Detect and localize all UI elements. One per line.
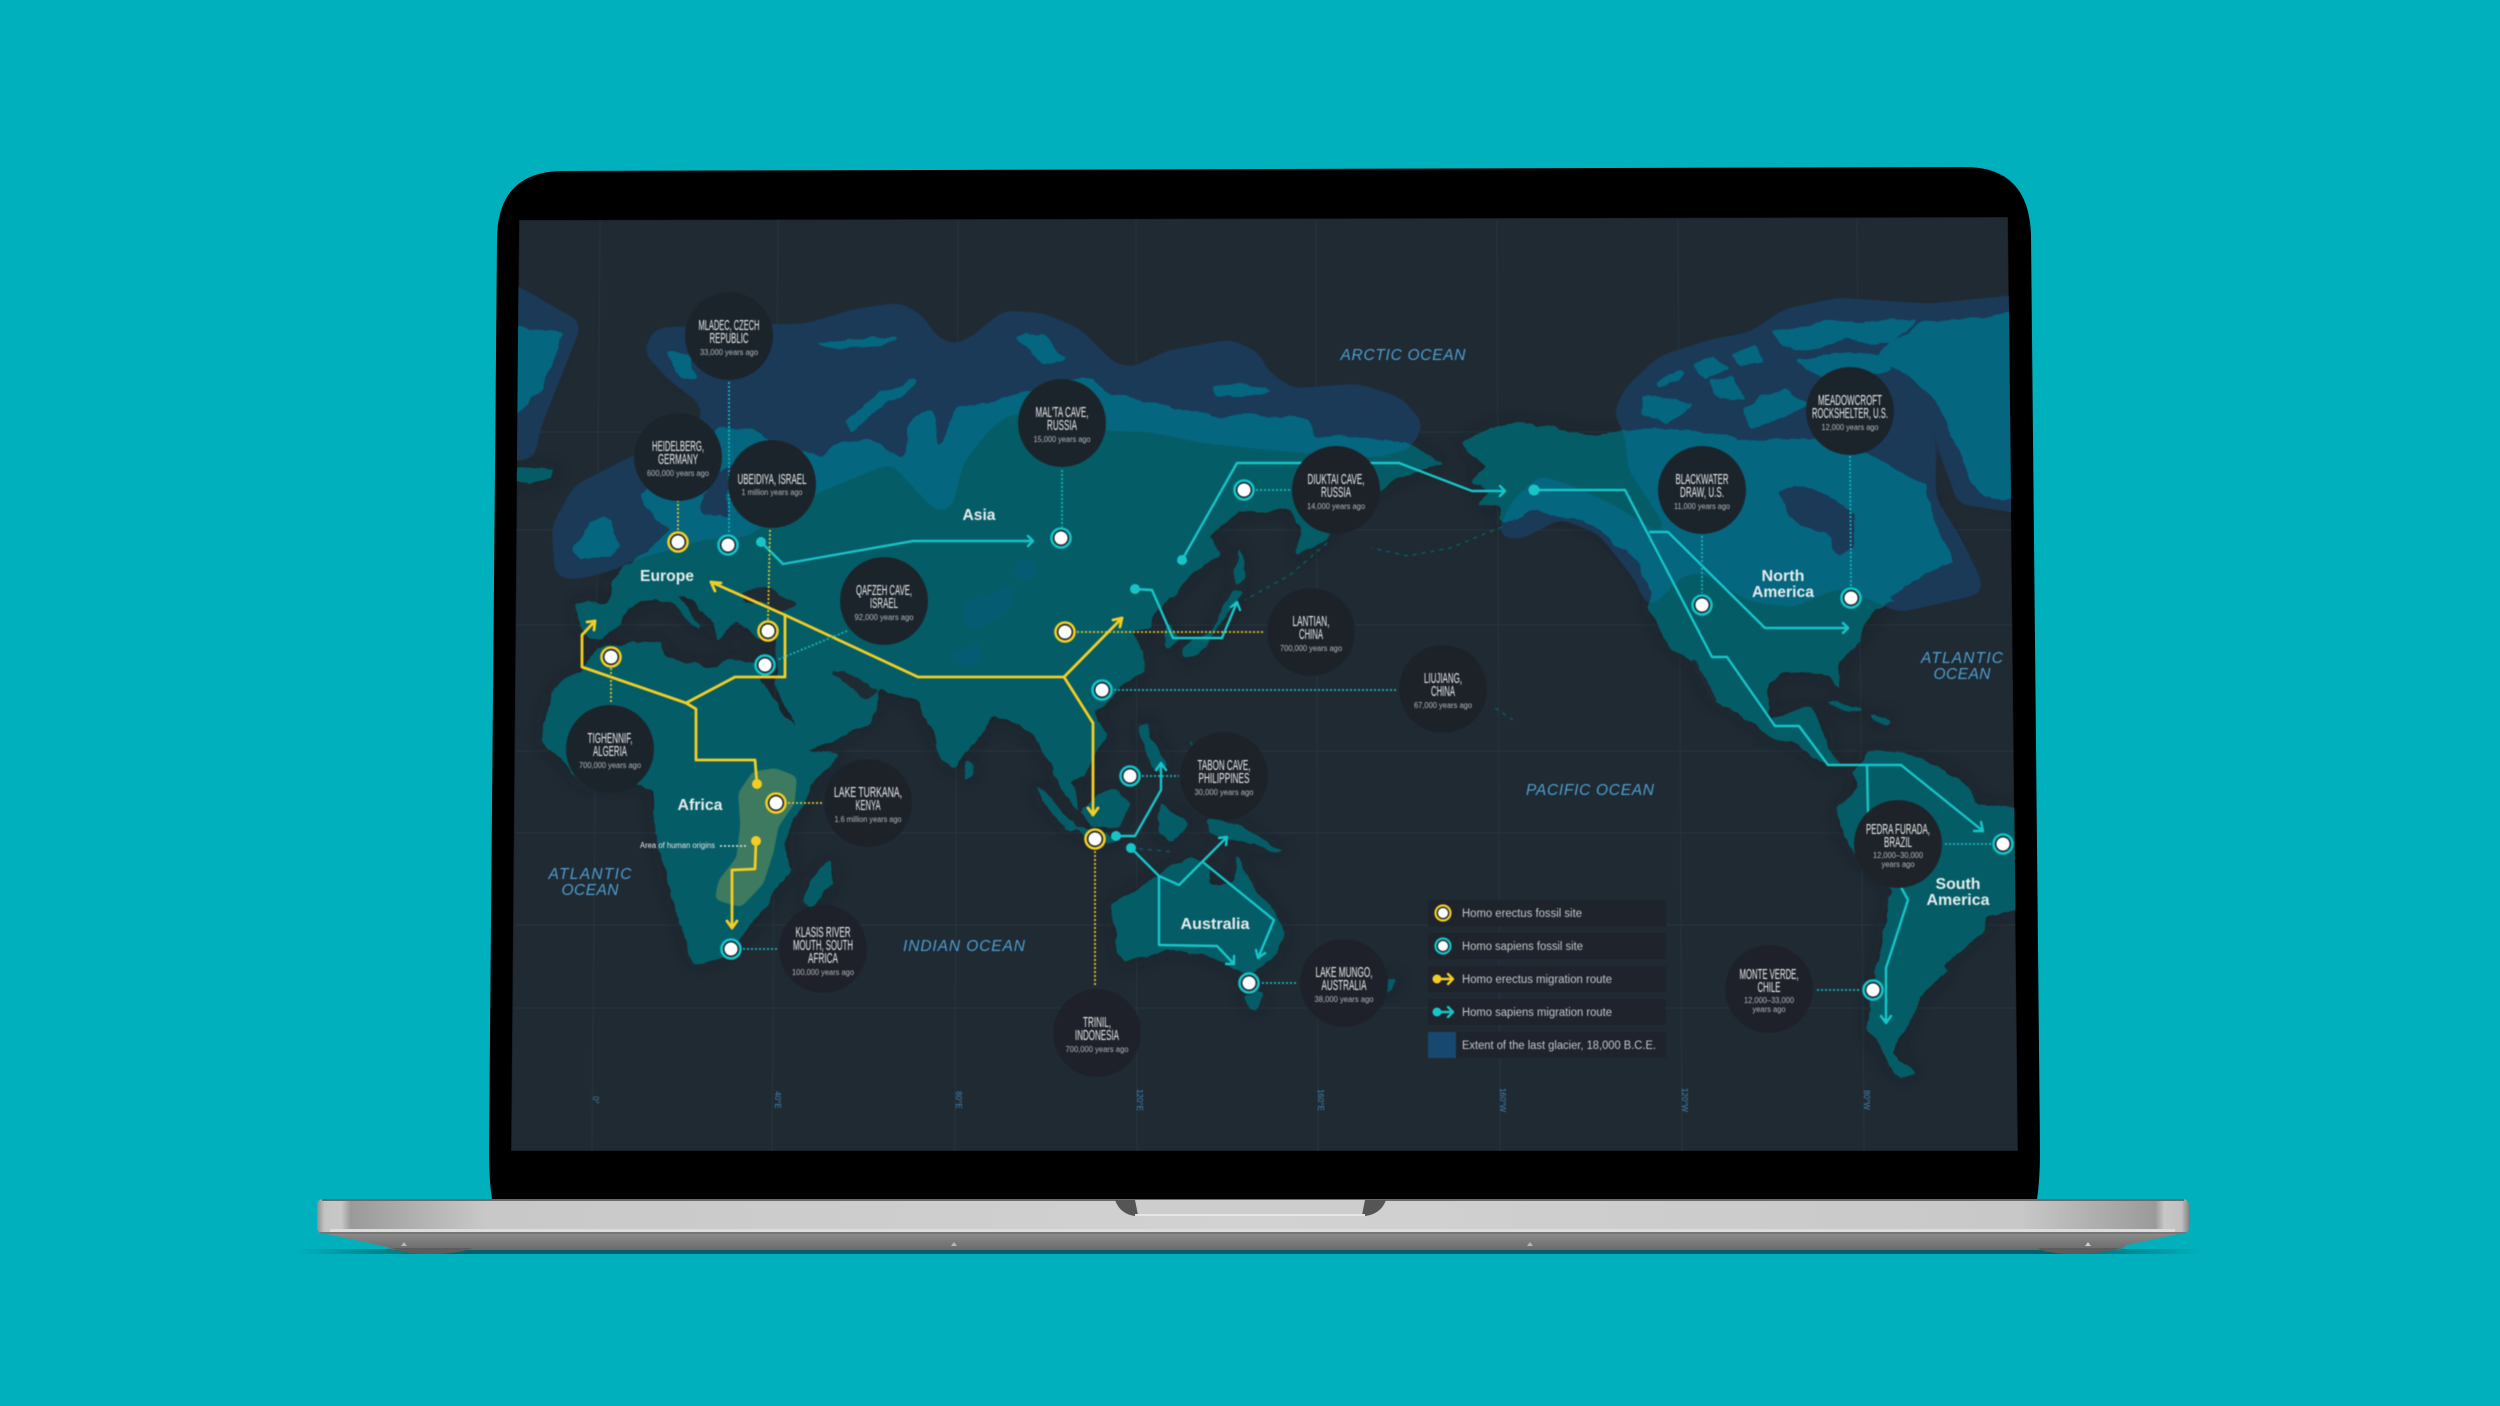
bubble: Tighennif: ALGERIA bbox=[593, 744, 627, 760]
bubble: Meadowcroft: MEADOWCROFT bbox=[1818, 393, 1882, 409]
bubble: Lake Turkana: KENYA bbox=[856, 798, 881, 814]
bubble: Tabon: 30,000 years ago bbox=[1194, 787, 1254, 797]
ocean labels: OCEAN bbox=[1934, 666, 1991, 683]
bubble: Monte Verde: MONTE VERDE, bbox=[1740, 967, 1798, 983]
bubble: Mal'ta: MAL'TA CAVE, bbox=[1036, 405, 1088, 421]
ocean labels: ARCTIC OCEAN bbox=[1340, 347, 1466, 364]
continent labels: America bbox=[1926, 892, 1990, 909]
bubble: Mal'ta: 15,000 years ago bbox=[1034, 434, 1091, 444]
continent labels: Europe bbox=[640, 568, 694, 585]
bubble: Lake Turkana bbox=[824, 759, 912, 847]
bubble: Pedra Furada: years ago bbox=[1882, 859, 1915, 869]
coastal shadow bbox=[733, 624, 1866, 925]
bubble: Diuktai bbox=[1292, 446, 1380, 534]
marker centres bbox=[604, 484, 2010, 996]
bubble: Ubeidiya bbox=[728, 440, 816, 528]
bubble: Heidelberg: 600,000 years ago bbox=[647, 468, 709, 478]
bubble: Diuktai: DIUKTAI CAVE, bbox=[1308, 472, 1364, 488]
bubble: Ubeidiya: UBEIDIYA, ISRAEL bbox=[738, 472, 806, 488]
bubble: Mal'ta: RUSSIA bbox=[1047, 418, 1077, 434]
bubble: Pedra Furada: BRAZIL bbox=[1884, 835, 1912, 851]
longitude labels: 160°E bbox=[1316, 1089, 1325, 1111]
bubble: Meadowcroft bbox=[1806, 367, 1894, 455]
area of human origins bbox=[719, 772, 793, 903]
hinge notch bbox=[1115, 1200, 1386, 1216]
bubble: Qafzeh bbox=[840, 557, 928, 645]
bubble: Trinil: 700,000 years ago bbox=[1066, 1044, 1129, 1054]
legend row: sapiens route: Homo sapiens migration route bbox=[1462, 1007, 1612, 1019]
bubble: Tighennif: TIGHENNIF, bbox=[588, 731, 632, 747]
ocean labels: ATLANTIC bbox=[548, 866, 632, 883]
laptop base shadow bbox=[295, 1249, 2205, 1254]
bubble: Trinil: TRINIL, bbox=[1083, 1015, 1111, 1031]
bubble: Lake Mungo: 38,000 years ago bbox=[1314, 994, 1374, 1004]
land masses bbox=[500, 310, 2040, 1077]
bubble: Diuktai: RUSSIA bbox=[1321, 485, 1351, 501]
bubble: Meadowcroft: ROCKSHELTER, U.S. bbox=[1812, 406, 1888, 422]
bubble: Meadowcroft: 12,000 years ago bbox=[1822, 422, 1879, 432]
bubble: Klasis River: MOUTH, SOUTH bbox=[793, 938, 853, 954]
bubble: Klasis River: AFRICA bbox=[808, 951, 838, 967]
bubble: Mladec: MLADEC, CZECH bbox=[698, 318, 760, 334]
bubble: Liujiang bbox=[1399, 645, 1487, 733]
Homo sapiens site markers bbox=[718, 480, 2012, 1000]
Homo sapiens migration routes bbox=[756, 463, 1983, 1023]
bubble: Tabon: PHILIPPINES bbox=[1198, 771, 1250, 787]
bubble: Lake Turkana: LAKE TURKANA, bbox=[834, 785, 902, 801]
bubble: Heidelberg: HEIDELBERG, bbox=[652, 439, 704, 455]
laptop bezel bbox=[489, 167, 2040, 1199]
bubble: Tabon: TABON CAVE, bbox=[1198, 758, 1250, 774]
area of human origins label: Area of human origins bbox=[640, 841, 715, 850]
continent labels: North bbox=[1762, 568, 1804, 585]
continent labels bbox=[640, 507, 1990, 933]
bubble: Tighennif: 700,000 years ago bbox=[579, 760, 641, 770]
bubble: Qafzeh: QAFZEH CAVE, bbox=[856, 583, 912, 599]
bubble: Lantian: 700,000 years ago bbox=[1280, 643, 1342, 653]
bubble: Liujiang: CHINA bbox=[1431, 684, 1455, 700]
leader lines bbox=[611, 382, 1991, 990]
bubble: Lake Mungo: AUSTRALIA bbox=[1322, 978, 1367, 994]
continent labels: Australia bbox=[1180, 916, 1250, 933]
legend row: glacier extent bbox=[1428, 1032, 1666, 1058]
legend row: erectus route: Homo erectus migration route bbox=[1462, 974, 1612, 986]
ocean labels: INDIAN OCEAN bbox=[903, 938, 1026, 955]
legend row: erectus fossil site: Homo erectus fossil site bbox=[1462, 908, 1582, 920]
legend row: sapiens fossil site bbox=[1428, 933, 1666, 959]
longitude labels: 0° bbox=[591, 1096, 600, 1104]
bubble: Liujiang: 67,000 years ago bbox=[1414, 700, 1472, 710]
bubble: Heidelberg: GERMANY bbox=[658, 452, 698, 468]
bubble: Trinil bbox=[1053, 989, 1141, 1077]
legend row: erectus fossil site bbox=[1428, 900, 1666, 926]
bubble: Liujiang: LIUJIANG, bbox=[1424, 671, 1462, 687]
bubble: Blackwater Draw bbox=[1658, 446, 1746, 534]
ocean labels: OCEAN bbox=[562, 882, 619, 899]
Homo erectus site markers bbox=[602, 532, 1104, 848]
glacier extent bbox=[495, 278, 2040, 608]
bubble: Klasis River bbox=[779, 905, 867, 993]
bubble: Ubeidiya: 1 million years ago bbox=[742, 487, 803, 497]
longitude labels: 120°W bbox=[1680, 1088, 1689, 1112]
legend row: sapiens route bbox=[1428, 999, 1666, 1025]
bubble: Pedra Furada bbox=[1854, 800, 1942, 888]
bubble: Blackwater Draw: BLACKWATER bbox=[1676, 472, 1728, 488]
bubble: Mladec bbox=[684, 319, 774, 380]
longitude labels: 80°E bbox=[954, 1091, 963, 1109]
ocean labels: ATLANTIC bbox=[1920, 650, 2004, 667]
bubble: Blackwater Draw: 11,000 years ago bbox=[1674, 501, 1730, 511]
bubble: Qafzeh: 92,000 years ago bbox=[854, 612, 914, 622]
ocean labels: PACIFIC OCEAN bbox=[1526, 782, 1655, 799]
longitude labels: 160°W bbox=[1498, 1088, 1507, 1112]
continent labels: Africa bbox=[678, 797, 723, 814]
bubble: Klasis River: KLASIS RIVER bbox=[796, 925, 850, 941]
bubble: Trinil: INDONESIA bbox=[1075, 1028, 1119, 1044]
legend bbox=[1428, 900, 1666, 1058]
continent labels: Asia bbox=[962, 507, 996, 524]
Homo erectus migration routes bbox=[582, 582, 1122, 928]
bubble: Lake Mungo bbox=[1300, 939, 1388, 1027]
bubble: Lake Turkana: 1.6 million years ago bbox=[834, 814, 902, 824]
bubble: Tabon bbox=[1180, 732, 1268, 820]
bubble: Monte Verde bbox=[1725, 945, 1813, 1033]
bubble: Mladec: REPUBLIC bbox=[710, 331, 748, 347]
ocean labels bbox=[548, 347, 2004, 955]
longitude labels bbox=[591, 1088, 1871, 1112]
legend row: glacier extent: Extent of the last glacier, 18,000 B.C.E. bbox=[1462, 1040, 1656, 1052]
bubble: Qafzeh: ISRAEL bbox=[870, 596, 898, 612]
bubble: Pedra Furada: PEDRA FURADA, bbox=[1866, 822, 1930, 838]
longitude labels: 40°E bbox=[773, 1091, 782, 1109]
continent labels: America bbox=[1752, 584, 1814, 601]
longitude labels: 80°W bbox=[1862, 1090, 1871, 1110]
bubble: Pedra Furada: 12,000–30,000 bbox=[1873, 850, 1923, 860]
bubble: Diuktai: 14,000 years ago bbox=[1307, 501, 1365, 511]
bubble: Lantian bbox=[1267, 588, 1355, 676]
bubble: Klasis River: 100,000 years ago bbox=[792, 967, 854, 977]
map screen bbox=[495, 217, 2040, 1151]
bubble: Monte Verde: CHILE bbox=[1758, 980, 1781, 996]
continent labels: South bbox=[1936, 876, 1980, 893]
bubble: Lake Mungo: LAKE MUNGO, bbox=[1316, 965, 1372, 981]
bubble: Heidelberg bbox=[634, 413, 722, 501]
bubble: Blackwater Draw: DRAW, U.S. bbox=[1680, 485, 1724, 501]
bubble: Monte Verde: 12,000–33,000 bbox=[1744, 995, 1794, 1005]
legend row: erectus route bbox=[1428, 966, 1666, 992]
bubble: Lantian: LANTIAN, bbox=[1292, 614, 1330, 630]
bubble: Lantian: CHINA bbox=[1299, 627, 1323, 643]
legend row: sapiens fossil site: Homo sapiens fossil site bbox=[1462, 941, 1583, 953]
bubble: Tighennif bbox=[566, 705, 654, 793]
laptop base bbox=[317, 1199, 2189, 1254]
bubble: Monte Verde: years ago bbox=[1752, 1004, 1786, 1014]
bubble: Mladec: 33,000 years ago bbox=[700, 347, 758, 357]
bubble: Mal'ta bbox=[1018, 379, 1106, 467]
longitude labels: 120°E bbox=[1135, 1089, 1144, 1111]
